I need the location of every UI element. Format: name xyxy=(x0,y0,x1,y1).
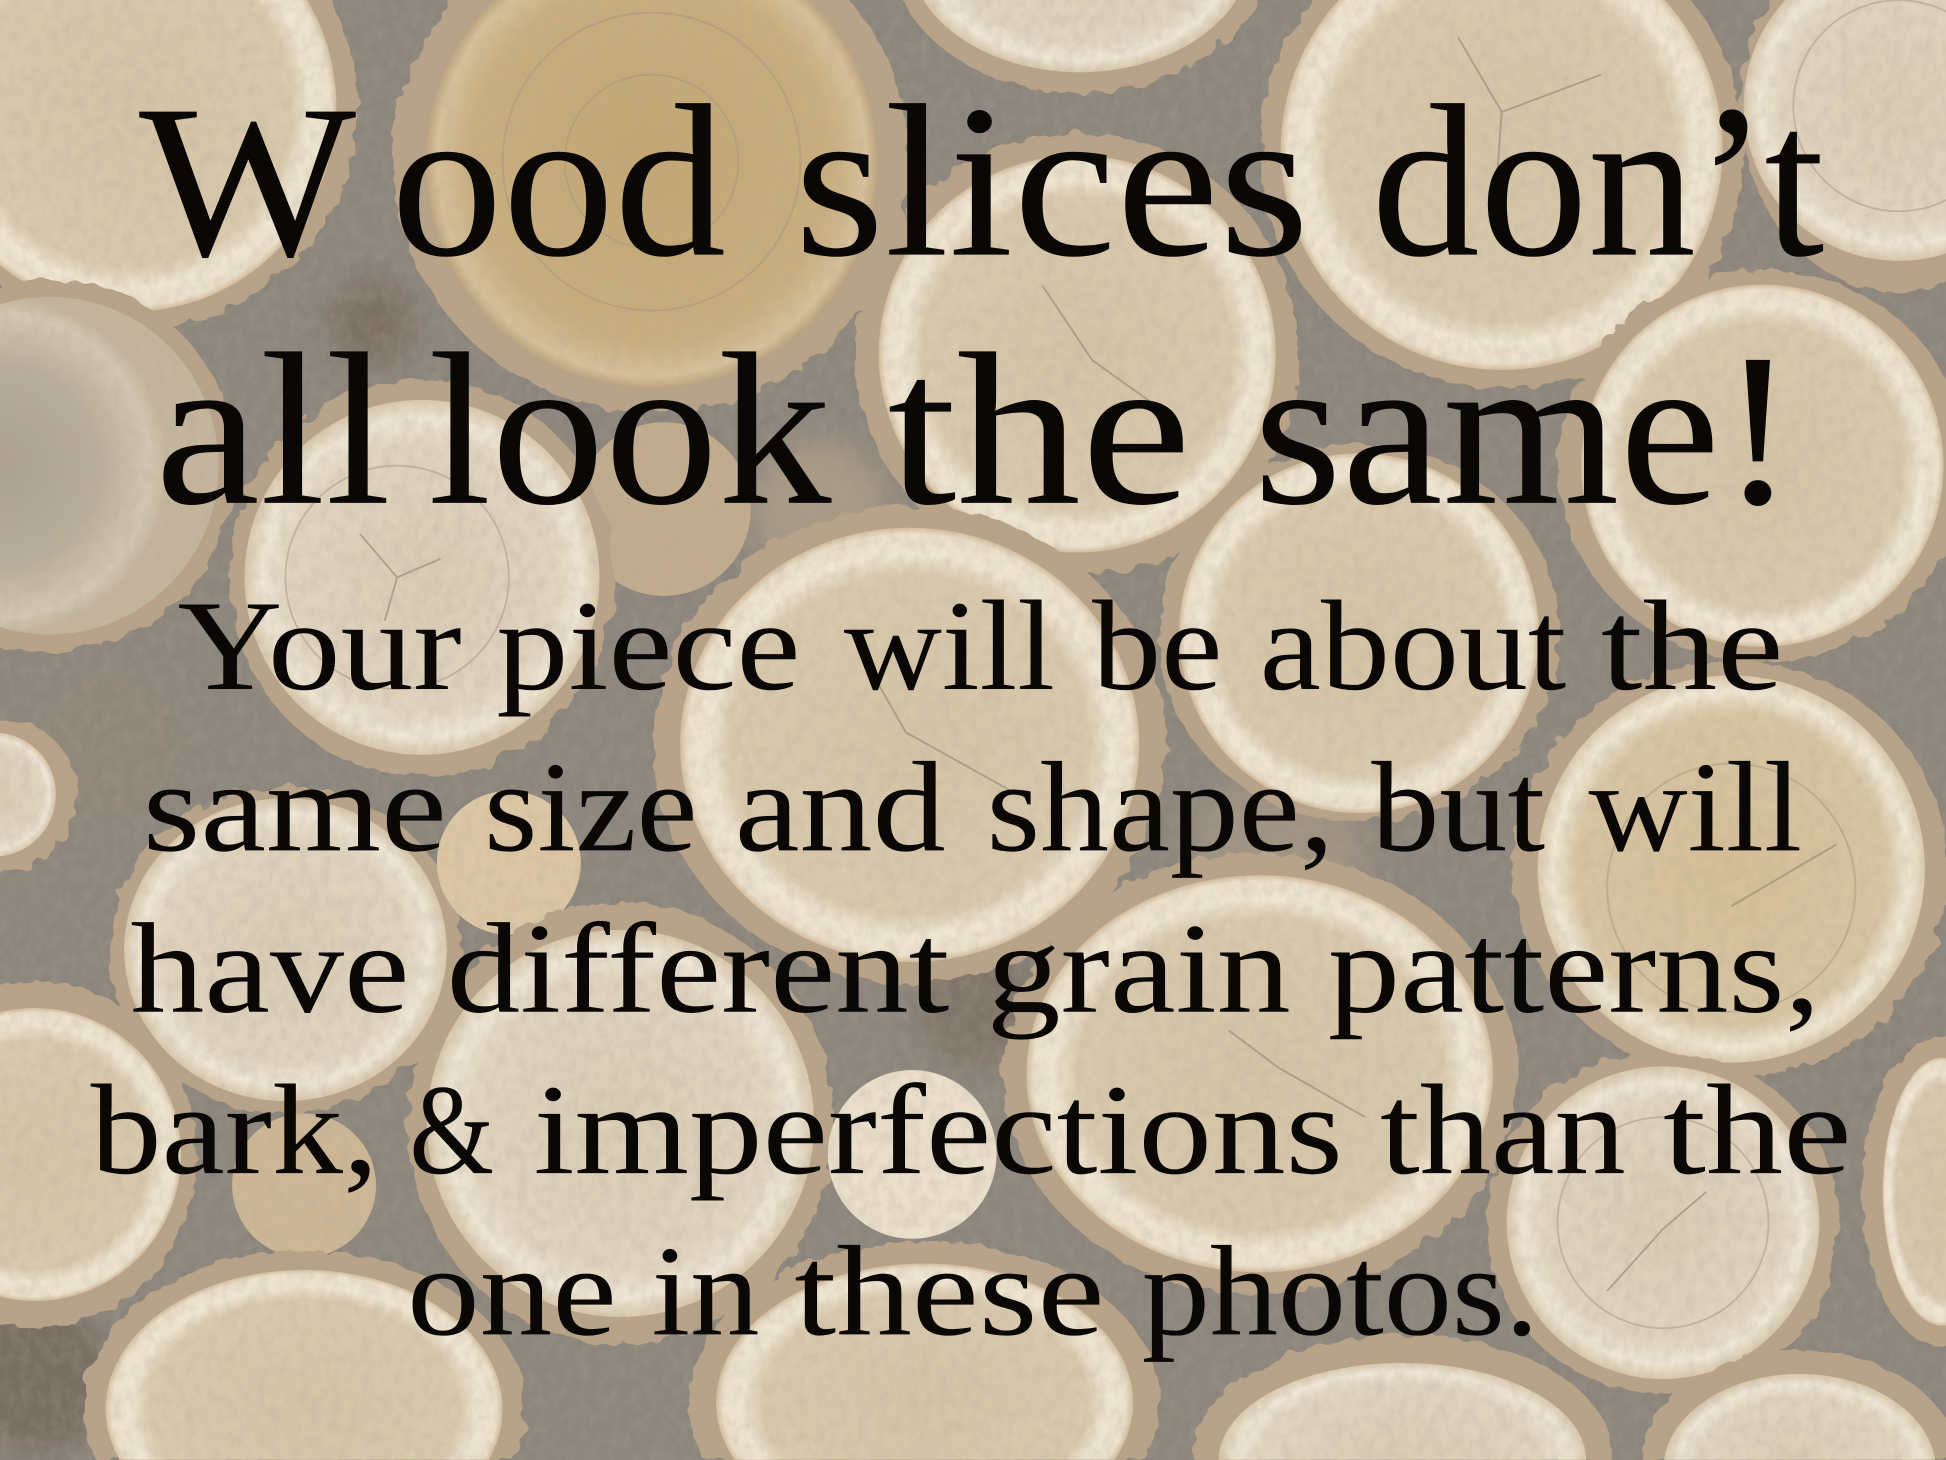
body line 1: about xyxy=(1260,574,1566,717)
body line 5: one xyxy=(407,1219,617,1362)
log: top centre xyxy=(891,0,1268,93)
log: small between xyxy=(577,422,751,596)
log: left middle grey xyxy=(0,279,236,652)
body line 5: these xyxy=(794,1219,1105,1362)
title line 2: same! xyxy=(1253,309,1796,551)
title line 1: ood xyxy=(391,61,726,303)
body line 4: bark, xyxy=(91,1058,379,1201)
body line 4: the xyxy=(1663,1058,1852,1201)
body line 1: will xyxy=(844,574,1055,717)
body line 1 xyxy=(177,574,1783,717)
body line 1: Your xyxy=(177,574,462,717)
log: top left xyxy=(0,0,357,329)
body line 5: photos. xyxy=(1142,1219,1539,1362)
title line 2: the xyxy=(887,309,1191,551)
body line 2: and xyxy=(735,735,946,878)
log: left centre pale xyxy=(230,379,614,776)
body line 1: piece xyxy=(496,574,800,717)
log: right lower xyxy=(1514,660,1946,1078)
body line 3: patterns, xyxy=(1328,897,1821,1040)
log: centre upper xyxy=(856,133,1298,575)
body line 4: than xyxy=(1380,1058,1626,1201)
log: right middle xyxy=(1558,270,1946,662)
title line 2: look xyxy=(428,309,832,551)
title line 1: don’t xyxy=(1371,61,1824,303)
log: centre large xyxy=(653,507,1167,983)
body line 5 xyxy=(407,1219,1539,1362)
log: lower right xyxy=(1487,1051,1839,1394)
body line 4: & xyxy=(410,1058,494,1201)
body line 3: have xyxy=(130,897,410,1040)
log: far right lower xyxy=(1862,1037,1946,1347)
body line 4: imperfections xyxy=(534,1058,1343,1201)
log: small lower centre xyxy=(828,1070,997,1239)
log: bottom right xyxy=(1194,1335,1611,1460)
body line 2: same xyxy=(143,735,447,878)
body line 3: grain xyxy=(987,897,1291,1040)
log: top right large xyxy=(1260,0,1744,387)
log: small lower left xyxy=(232,1113,376,1257)
body line 2: size xyxy=(484,735,697,878)
log: left lower xyxy=(109,786,462,1113)
title line 1 xyxy=(139,61,1824,303)
body line 3 xyxy=(130,897,1821,1040)
title line 1: W xyxy=(139,61,356,303)
body line 3: different xyxy=(447,897,950,1040)
log: lower centre right xyxy=(1003,853,1517,1295)
title line 2 xyxy=(155,309,1796,551)
body line 2: but xyxy=(1371,735,1545,878)
body line 1: the xyxy=(1601,574,1783,717)
log: lower centre left xyxy=(407,903,834,1344)
body line 2 xyxy=(143,735,1802,878)
log: left bottom xyxy=(0,981,196,1328)
log: far left middle small xyxy=(0,718,77,871)
title xyxy=(139,61,1824,551)
log: top right corner xyxy=(1740,0,1946,292)
body line 4 xyxy=(91,1058,1852,1201)
log: bottom left xyxy=(83,1250,525,1460)
title line 2: all xyxy=(155,309,391,551)
body text xyxy=(91,574,1852,1362)
log: bottom right corner xyxy=(1641,1350,1946,1460)
log: small knot xyxy=(437,791,581,935)
log: top golden xyxy=(393,0,910,412)
title line 1: slices xyxy=(794,61,1309,303)
body line 5: in xyxy=(652,1219,760,1362)
log: bottom centre xyxy=(689,1241,1160,1460)
body line 2: will xyxy=(1589,735,1802,878)
body line 1: be xyxy=(1092,574,1222,717)
log: centre right xyxy=(1158,445,1560,822)
body line 2: shape, xyxy=(987,735,1334,878)
